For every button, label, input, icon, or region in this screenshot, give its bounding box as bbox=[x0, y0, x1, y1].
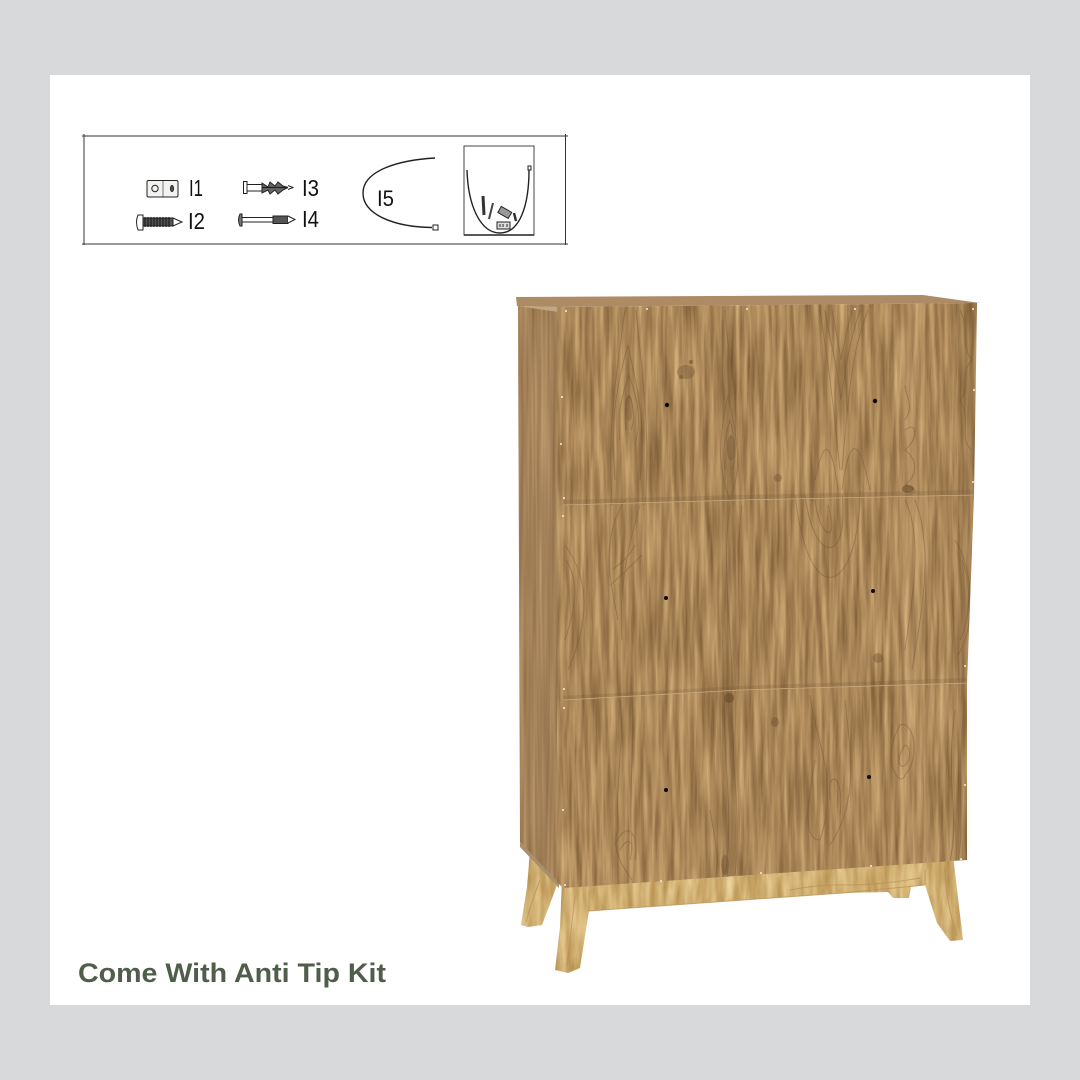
part I5 wire bbox=[363, 158, 438, 230]
side panel lower edge bbox=[520, 842, 559, 888]
mounting holes bbox=[664, 399, 877, 792]
cathedral grain patterns bbox=[565, 310, 972, 880]
legs and rail bbox=[521, 852, 963, 973]
part I3 anchor bbox=[244, 175, 319, 201]
part I2 screw: I2 bbox=[188, 208, 205, 234]
kit bag bbox=[464, 146, 534, 235]
anti tip kit parts diagram bbox=[82, 134, 568, 245]
part I4 long screw bbox=[238, 206, 319, 232]
part I1 bracket bbox=[147, 175, 203, 201]
leg and rail shading bbox=[526, 868, 957, 967]
caption: Come With Anti Tip Kit bbox=[78, 958, 386, 988]
tonal bands bbox=[722, 300, 978, 890]
part I3 anchor: I3 bbox=[302, 175, 319, 201]
back panel with wood grain bbox=[555, 300, 980, 890]
nail pins bbox=[560, 308, 975, 886]
drawer seams bbox=[563, 490, 973, 505]
top panel bbox=[516, 295, 980, 307]
part I4 long screw: I4 bbox=[302, 206, 319, 232]
cabinet back view bbox=[515, 295, 980, 980]
part I2 screw bbox=[136, 208, 205, 234]
part I5 wire: I5 bbox=[377, 186, 394, 211]
diagram frame bbox=[82, 134, 568, 245]
infographic canvas bbox=[50, 75, 1030, 1005]
knots bbox=[625, 360, 914, 875]
part I1 bracket: I1 bbox=[189, 175, 203, 201]
side panel bbox=[518, 306, 557, 881]
white panel bbox=[50, 75, 1030, 1005]
